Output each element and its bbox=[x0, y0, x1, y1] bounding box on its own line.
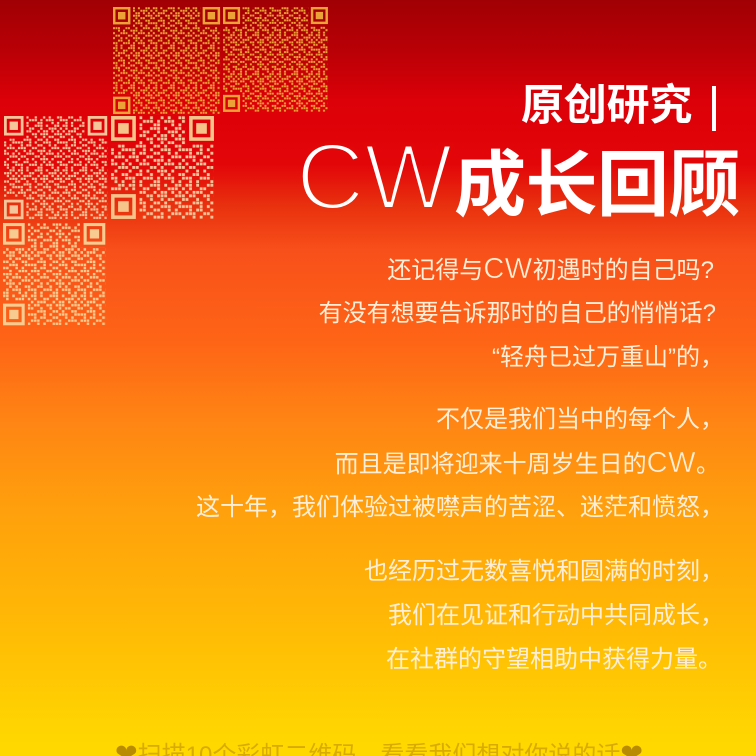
QR code 1 bbox=[113, 7, 220, 114]
QR code 3 bbox=[4, 116, 107, 219]
body text: paragraph 2 bbox=[196, 406, 724, 521]
body text: paragraph 2: 不仅是我们当中的每个人， bbox=[436, 406, 724, 433]
body text: paragraph 1 bbox=[319, 253, 724, 371]
body text: paragraph 1: 还记得与CW初遇时的自己吗? bbox=[387, 253, 714, 285]
body text: paragraph 3: 也经历过无数喜悦和圆满的时刻， bbox=[364, 558, 724, 585]
body text: paragraph 1: “轻舟已过万重山”的， bbox=[492, 344, 724, 371]
body text: paragraph 2: 而且是即将迎来十周岁生日的CW。 bbox=[335, 447, 720, 479]
heading: 原创研究: 原创研究 bbox=[521, 82, 692, 130]
title latin: CW bbox=[296, 134, 453, 230]
body text: paragraph 1: 有没有想要告诉那时的自己的悄悄话? bbox=[319, 300, 716, 327]
QR code 5 bbox=[3, 223, 105, 325]
body text: paragraph 3: 我们在见证和行动中共同成长， bbox=[388, 602, 724, 629]
QR code 4 bbox=[111, 116, 214, 219]
body text: paragraph 2: 这十年，我们体验过被噤声的苦涩、迷茫和愤怒， bbox=[196, 494, 724, 521]
body text: paragraph 3 bbox=[364, 558, 724, 673]
body text: paragraph 3: 在社群的守望相助中获得力量。 bbox=[386, 646, 722, 673]
title: CW成长回顾 bbox=[296, 134, 740, 230]
title chinese: 成长回顾: 成长回顾 bbox=[454, 146, 740, 226]
QR code 2 bbox=[223, 7, 328, 112]
QR code group: rainbow QR codes bbox=[3, 7, 328, 326]
divider bar bbox=[712, 86, 716, 131]
